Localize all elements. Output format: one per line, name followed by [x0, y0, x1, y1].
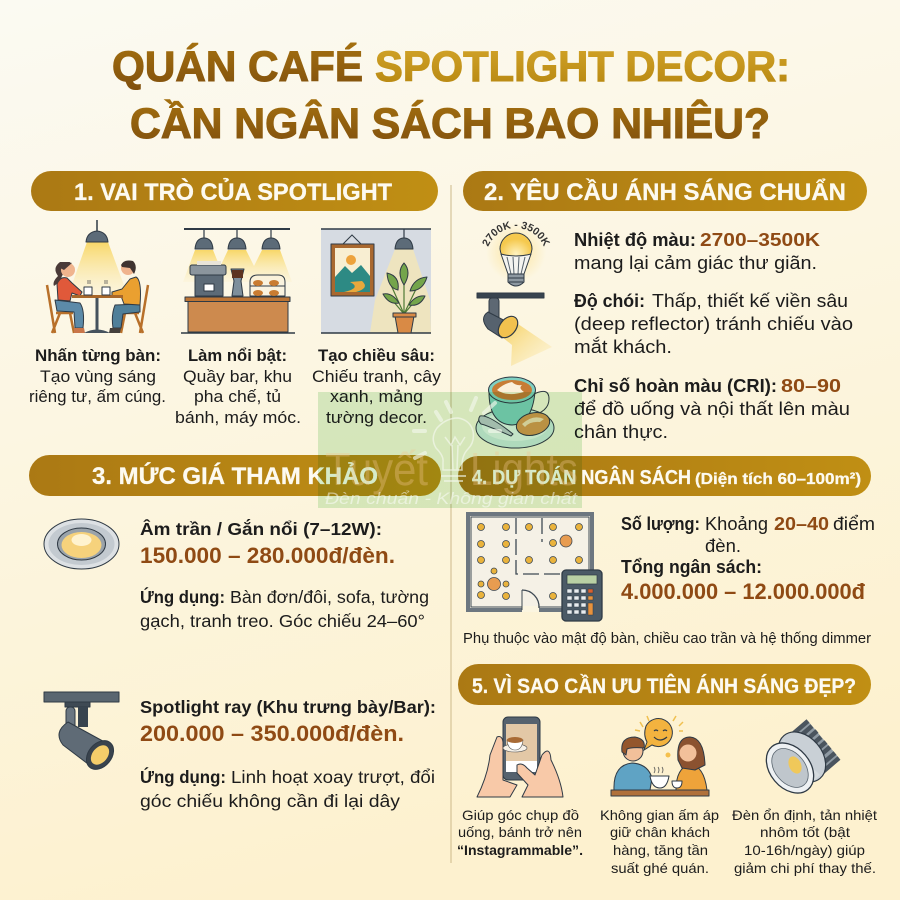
text: âm trần: Âm trần / Gắn nổi (7–12W):: [140, 518, 382, 539]
text: nhiệt độ màu: [574, 229, 821, 273]
watermark: Tuyết: [325, 443, 428, 495]
caption: nhấn từng bàn: [29, 347, 166, 406]
text: spotlight ray: Linh hoạt xoay trượt, đổi: [231, 767, 435, 787]
icon: coffee bar counter: [181, 229, 295, 333]
caption: tạo chiều sâu: Tạo chiều sâu:: [318, 347, 435, 365]
text: độ chói: Độ chói:: [574, 290, 645, 311]
caption: làm nổi bật: pha chế, tủ: [194, 388, 281, 406]
caption: đèn ổn định: [732, 807, 877, 876]
caption: làm nổi bật: [175, 347, 301, 427]
caption: instagrammable: “Instagrammable”.: [457, 842, 583, 858]
icon: floor plan with light points and calculator: [468, 514, 602, 621]
title: CẦN NGÂN SÁCH BAO NHIÊU?: [130, 99, 770, 148]
text: số lượng and tổng ngân sách: Tổng ngân sách:: [621, 556, 762, 577]
watermark: Lights: [470, 443, 578, 495]
text: spotlight ray: 200.000 – 350.000đ/đèn.: [140, 721, 404, 746]
panel: mức giá tham khảo: [29, 455, 441, 811]
heading 1: 1. VAI TRÒ CỦA SPOTLIGHT: [74, 177, 392, 206]
heading 3: 3. MỨC GIÁ THAM KHẢO: [92, 461, 378, 490]
caption: tạo chiều sâu: [312, 347, 442, 427]
panel: dự toán ngân sách: [458, 456, 875, 647]
caption: làm nổi bật: Quầy bar, khu: [183, 368, 292, 386]
caption: tạo chiều sâu: xanh, mảng: [330, 388, 423, 406]
icon: latte cup with pastry: [476, 377, 554, 448]
caption: nhấn từng bàn: riêng tư, ấm cúng.: [29, 388, 166, 406]
heading 4: [458, 456, 871, 496]
caption: đèn ổn định: Đèn ổn định, tản nhiệt: [732, 807, 877, 823]
title: QUÁN CAFÉ: [112, 43, 363, 91]
title: SPOTLIGHT DECOR:: [375, 43, 790, 91]
text: spotlight ray: [140, 697, 436, 811]
heading 2: 2. YÊU CẦU ÁNH SÁNG CHUẨN: [484, 178, 846, 206]
icon: happy customers at table: [611, 716, 709, 796]
text: độ chói: [574, 290, 853, 357]
caption: đèn ổn định: 10-16h/ngày) giúp: [744, 842, 865, 858]
caption: không gian ấm áp: giữ chân khách: [610, 824, 710, 840]
caption: không gian ấm áp: suất ghé quán.: [611, 860, 709, 876]
watermark: [318, 392, 582, 508]
caption: tạo chiều sâu: Chiếu tranh, cây: [312, 368, 442, 386]
heading 3: [29, 455, 441, 496]
heading 5: 5. VÌ SAO CẦN ƯU TIÊN ÁNH SÁNG ĐẸP?: [472, 674, 856, 698]
text: số lượng and tổng ngân sách: đèn.: [705, 535, 741, 556]
caption: không gian ấm áp: Không gian ấm áp: [600, 807, 719, 823]
caption: tạo chiều sâu: tường decor.: [326, 409, 427, 427]
title: [112, 43, 790, 148]
icon: wall with picture and plant: [321, 229, 431, 333]
caption: instagrammable: Giúp góc chụp đồ: [462, 807, 579, 823]
heading 4: (Diện tích 60–100m²): [695, 471, 861, 488]
text: chỉ số hoàn màu: để đồ uống và nội thất lên màu: [574, 398, 850, 419]
text: độ chói: Thấp, thiết kế viền sâu: [652, 290, 848, 311]
caption: nhấn từng bàn: Nhấn từng bàn:: [35, 347, 161, 365]
caption: instagrammable: [457, 807, 583, 858]
text: số lượng and tổng ngân sách: điểm: [833, 513, 875, 534]
icon: warm bulb: [482, 221, 550, 286]
heading 4: 4. DỰ TOÁN NGÂN SÁCH: [472, 465, 691, 489]
heading 2: [463, 171, 867, 211]
icon: recessed downlight: [44, 519, 119, 569]
icon: track spotlight: [44, 692, 119, 775]
heading 5: [458, 664, 871, 705]
icon: track spotlight with beam: [477, 293, 552, 366]
panel: yêu cầu ánh sáng chuẩn: [463, 171, 867, 448]
text: số lượng and tổng ngân sách: [621, 513, 875, 604]
icon: aluminium heatsink cob module: [757, 721, 839, 802]
text: âm trần: gạch, tranh treo. Góc chiếu 24–60°: [140, 611, 425, 631]
icon: warm bulb: 2700K - 3500K: [482, 221, 550, 246]
text: âm trần: [140, 518, 429, 631]
caption: nhấn từng bàn: Tạo vùng sáng: [40, 368, 156, 386]
panel: vai trò của spotlight: [29, 171, 442, 427]
icon: hands holding phone: [477, 717, 563, 797]
note: phụ thuộc: Phụ thuộc vào mật độ bàn, chiều cao trần và hệ thống dimmer: [463, 630, 871, 647]
text: chỉ số hoàn màu: 80–90: [781, 375, 841, 396]
text: nhiệt độ màu: Nhiệt độ màu:: [574, 229, 696, 250]
caption: không gian ấm áp: [600, 807, 719, 876]
text: chỉ số hoàn màu: Chỉ số hoàn màu (CRI):: [574, 375, 777, 396]
text: nhiệt độ màu: 2700–3500K: [700, 229, 821, 250]
panel: vì sao cần ưu tiên ánh sáng đẹp: [457, 664, 877, 876]
text: số lượng and tổng ngân sách: 4.000.000 – 12.000.000đ: [621, 579, 866, 604]
text: chỉ số hoàn màu: [574, 375, 850, 442]
caption: làm nổi bật: Làm nổi bật:: [188, 347, 287, 365]
watermark: Đèn chuẩn - Không gian chất: [325, 489, 578, 508]
caption: đèn ổn định: nhôm tốt (bật: [760, 824, 850, 840]
icon: couple at table under lamp: [47, 220, 148, 333]
text: số lượng and tổng ngân sách: 20–40: [774, 513, 829, 534]
caption: làm nổi bật: bánh, máy móc.: [175, 409, 301, 427]
caption: không gian ấm áp: hàng, tăng tần: [613, 842, 708, 858]
text: số lượng and tổng ngân sách: Số lượng:: [621, 513, 700, 534]
text: spotlight ray: Ứng dụng:: [140, 766, 226, 787]
text: chỉ số hoàn màu: chân thực.: [574, 421, 668, 442]
caption: đèn ổn định: giảm chi phí thay thế.: [734, 860, 876, 876]
text: spotlight ray: Spotlight ray (Khu trưng bày/Bar):: [140, 697, 436, 717]
heading 1: [31, 171, 438, 211]
caption: instagrammable: uống, bánh trở nên: [458, 824, 582, 840]
text: spotlight ray: góc chiếu không cần đi lại dây: [140, 791, 400, 811]
text: âm trần: Bàn đơn/đôi, sofa, tường: [230, 587, 429, 607]
text: độ chói: (deep reflector) tránh chiếu vào: [574, 313, 853, 334]
text: nhiệt độ màu: mang lại cảm giác thư giãn.: [574, 252, 817, 273]
text: âm trần: Ứng dụng:: [140, 586, 225, 607]
text: số lượng and tổng ngân sách: Khoảng: [705, 513, 768, 534]
text: độ chói: mắt khách.: [574, 336, 672, 357]
text: âm trần: 150.000 – 280.000đ/đèn.: [140, 543, 395, 568]
